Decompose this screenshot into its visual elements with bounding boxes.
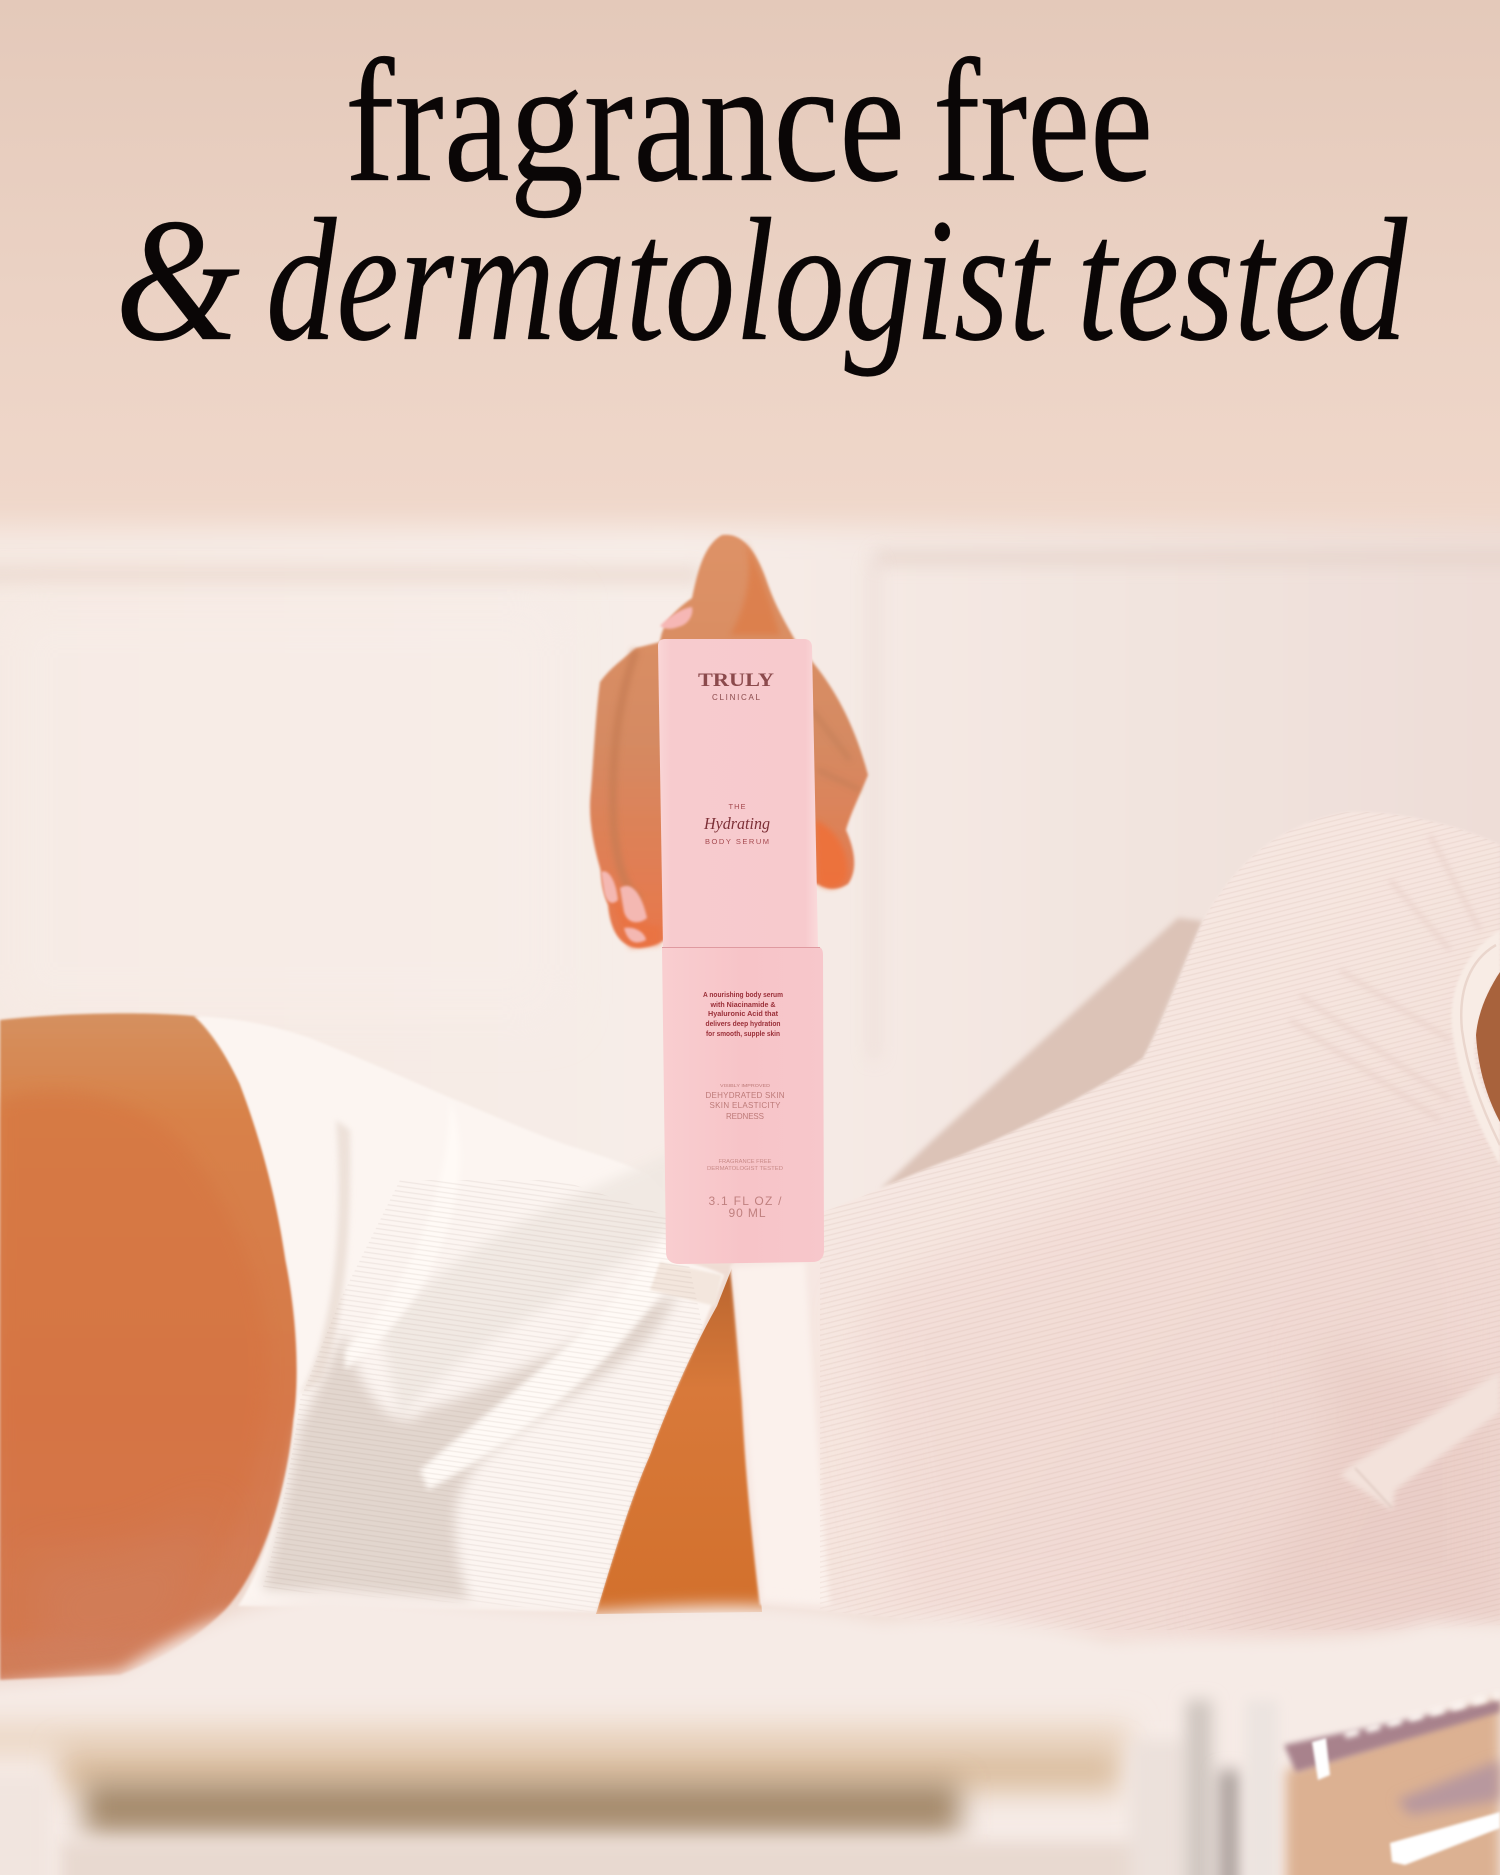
body: right torso shadow on headboard <box>880 918 1203 1190</box>
product box: product name: BODY SERUM <box>705 837 769 846</box>
product box: description: A nourishing body serum <box>703 992 783 999</box>
product box: benefits <box>706 1083 785 1121</box>
foreground: glass bottle <box>1130 1700 1278 1875</box>
product box: description: Hyaluronic Acid that <box>708 1011 779 1018</box>
foreground: blurred pillow <box>0 1592 1500 1875</box>
headboard <box>0 526 1500 1246</box>
foreground: silver cap <box>1284 1695 1500 1875</box>
product box: lower section <box>662 947 824 1264</box>
foreground: tan shelf band <box>0 1722 1160 1875</box>
product box: description: for smooth, supple skin <box>706 1031 780 1038</box>
product box: product name: Hydrating <box>703 814 770 833</box>
product box: brand text <box>698 670 774 702</box>
product box: description: with Niacinamide & <box>709 1002 776 1009</box>
product box: claims <box>707 1159 783 1172</box>
clothing: white shorts <box>194 1016 724 1612</box>
hand holding the product <box>590 535 868 948</box>
product box: product name <box>703 802 770 846</box>
clothing: strap seam <box>1340 1372 1500 1510</box>
product box: upper section <box>658 639 818 947</box>
background wall <box>0 0 1500 540</box>
title: line two: tested <box>1077 183 1408 378</box>
title: line one: free <box>933 24 1153 219</box>
product box: claims: DERMATOLOGIST TESTED <box>707 1166 783 1172</box>
product box: product name: THE <box>728 802 746 811</box>
body: midriff skin <box>596 1268 762 1614</box>
product box <box>658 639 824 1264</box>
product box: size: 90 ML <box>728 1206 766 1220</box>
title: line one: fragrance <box>345 24 905 219</box>
product box: benefits: VISIBLY IMPROVED <box>720 1083 771 1088</box>
product box: benefits: DEHYDRATED SKIN <box>706 1091 785 1100</box>
clothing: chest gathers <box>1290 835 1480 1120</box>
icon: fingernails <box>601 871 647 942</box>
body: left thigh <box>0 1013 297 1680</box>
title <box>115 24 1408 378</box>
product box: benefits: SKIN ELASTICITY <box>710 1101 781 1110</box>
icon: thumb nail <box>660 607 692 629</box>
title: line two: & <box>115 183 240 378</box>
product box: description: delivers deep hydration <box>706 1021 780 1028</box>
title: line two: dermatologist <box>266 183 1051 378</box>
hand: finger separation <box>613 650 640 900</box>
clothing: armhole and rib trim <box>1451 930 1500 1165</box>
product box: description <box>703 992 783 1038</box>
product box: brand text: TRULY <box>698 670 774 691</box>
product box: size <box>708 1194 782 1220</box>
product box: claims: FRAGRANCE FREE <box>718 1159 772 1165</box>
clothing: white top <box>730 800 1500 1645</box>
product box: brand text: CLINICAL <box>712 693 761 702</box>
product box: size: 3.1 FL OZ / <box>708 1194 782 1208</box>
product box: benefits: REDNESS <box>726 1112 764 1121</box>
